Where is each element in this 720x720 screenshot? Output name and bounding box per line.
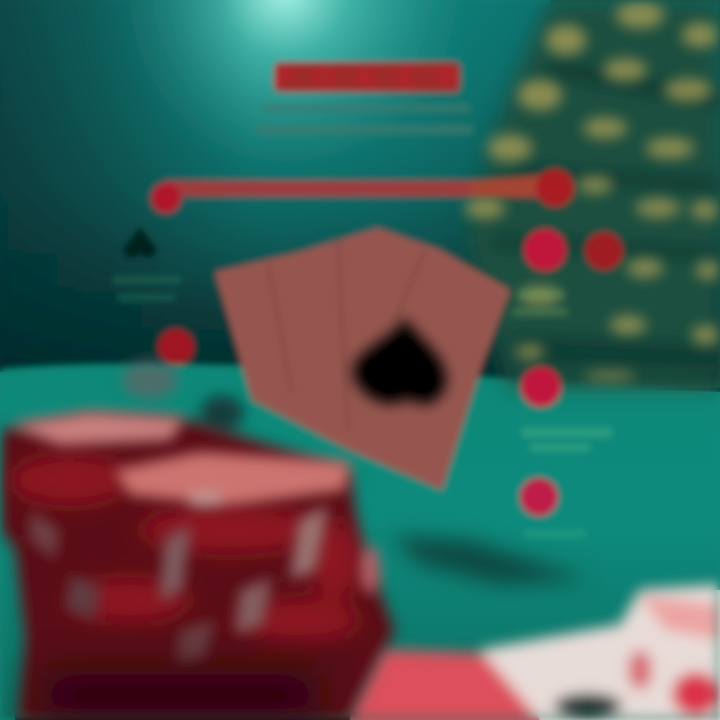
red header bar	[165, 174, 555, 198]
red marker: right lower	[520, 478, 558, 516]
title: POKER	[274, 62, 458, 93]
red marker: right upper pair	[524, 229, 623, 271]
right caption gold	[512, 290, 568, 316]
background wall	[0, 0, 720, 380]
playing cards hand	[215, 228, 510, 490]
red marker: left lower	[158, 329, 194, 365]
red marker: bar right	[536, 169, 574, 207]
red marker: right middle	[521, 367, 561, 407]
poker table surface	[0, 365, 720, 720]
right middle caption	[522, 428, 612, 451]
subtitle	[255, 104, 473, 134]
small grey chips	[122, 362, 244, 431]
card shadow on table	[390, 535, 590, 585]
red chip stack foreground	[0, 412, 395, 720]
icon: large black spade on card	[353, 318, 446, 404]
left caption	[112, 276, 182, 301]
foreground cards and red chip	[350, 585, 720, 720]
red marker: bar left	[151, 183, 181, 213]
right lower caption	[524, 530, 586, 538]
gold chip stack background	[465, 0, 720, 388]
icon: black spade left	[122, 226, 158, 258]
